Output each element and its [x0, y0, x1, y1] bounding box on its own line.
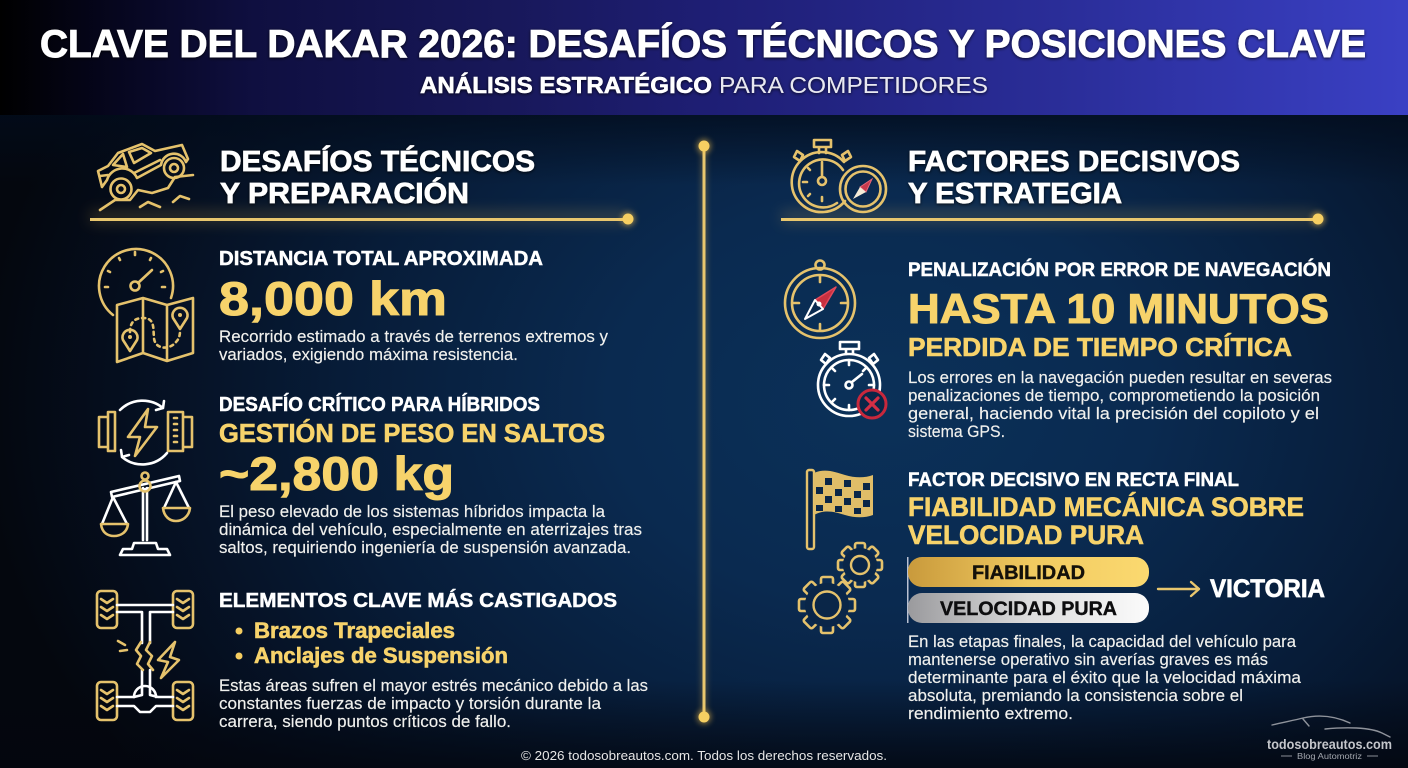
block: elementos clave: Estas áreas sufren el mayor estrés mecánico debido a las [219, 676, 648, 695]
block: distancia total: DISTANCIA TOTAL APROXIMADA [219, 248, 543, 270]
title: CLAVE DEL DAKAR 2026: DESAFÍOS TÉCNICOS Y POSICIONES CLAVE [40, 22, 1366, 66]
text block: etapas finales: mantenerse operativo sin averías graves es más [908, 650, 1268, 669]
block: factor decisivo: FIABILIDAD MECÁNICA SOBRE [908, 491, 1304, 522]
icon: gears [799, 543, 882, 633]
block: factor decisivo [908, 470, 1304, 550]
block: elementos clave: ELEMENTOS CLAVE MÁS CASTIGADOS [219, 589, 617, 612]
icon: navigation compass [785, 260, 855, 338]
block: elementos clave: carrera, siendo puntos críticos de fallo. [219, 712, 511, 731]
icon: speedometer and map [99, 249, 193, 362]
pill: fiabilidad: FIABILIDAD [972, 563, 1085, 584]
logo: todosobreautos: todosobreautos.com [1267, 737, 1392, 752]
header banner [0, 0, 1408, 115]
panel: right column [781, 140, 1332, 723]
heading: desafíos técnicos: DESAFÍOS TÉCNICOS [220, 144, 535, 178]
text block: etapas finales: absoluta, premiando la consistencia sobre el [908, 686, 1243, 705]
block: penalización: general, haciendo vital la precisión del copiloto y el [908, 404, 1319, 423]
block: penalización: penalizaciones de tiempo, comprometiendo la posición [908, 386, 1320, 405]
pill: velocidad pura [908, 593, 1149, 623]
icon: hybrid energy [99, 401, 192, 464]
icon: stopwatch and compass [792, 140, 886, 212]
block: híbridos: DESAFÍO CRÍTICO PARA HÍBRIDOS [219, 393, 540, 416]
block: distancia total: variados, exigiendo máxima resistencia. [219, 345, 518, 364]
block: factor decisivo: FACTOR DECISIVO EN RECTA FINAL [908, 470, 1239, 491]
block: penalización: Los errores en la navegación pueden resultar en severas [908, 368, 1332, 387]
text block: etapas finales [908, 632, 1302, 723]
icon: off-road jeep [98, 144, 193, 210]
block: penalización: PERDIDA DE TIEMPO CRÍTICA [908, 332, 1292, 362]
heading: desafíos técnicos [220, 144, 535, 210]
block: penalización: PENALIZACIÓN POR ERROR DE NAVEGACIÓN [908, 259, 1331, 281]
icon: suspension chassis [97, 591, 193, 720]
center divider [697, 139, 711, 724]
logo: todosobreautos [1267, 716, 1392, 761]
victoria label: VICTORIA [1210, 575, 1325, 603]
text block: etapas finales: rendimiento extremo. [908, 704, 1073, 723]
block: elementos clave: Anclajes de Suspensión [254, 643, 508, 668]
heading: factores decisivos: FACTORES DECISIVOS [908, 146, 1240, 178]
icon: balance scale [101, 472, 190, 555]
heading: factores decisivos [908, 146, 1240, 210]
block: híbridos: GESTIÓN DE PESO EN SALTOS [219, 418, 605, 448]
block: distancia total: Recorrido estimado a través de terrenos extremos y [219, 327, 608, 346]
pill: velocidad pura: VELOCIDAD PURA [940, 599, 1117, 620]
comparison pills [907, 557, 1149, 623]
block: híbridos: dinámica del vehículo, especialmente en aterrizajes tras [219, 520, 642, 539]
block: penalización [908, 259, 1332, 441]
block: híbridos [219, 393, 642, 557]
block: elementos clave: Brazos Trapeciales [254, 618, 455, 643]
block: híbridos: saltos, requiriendo ingeniería de suspensión avanzada. [219, 538, 631, 557]
block: penalización: HASTA 10 MINUTOS [908, 285, 1329, 332]
heading: factores decisivos: Y ESTRATEGIA [908, 178, 1122, 210]
subtitle: PARA COMPETIDORES [719, 72, 988, 98]
block: elementos clave [219, 589, 648, 731]
block: elementos clave: constantes fuerzas de impacto y torsión durante la [219, 694, 602, 713]
heading: desafíos técnicos: Y PREPARACIÓN [220, 176, 469, 210]
block: penalización: sistema GPS. [908, 422, 1005, 441]
block: distancia total [219, 248, 608, 364]
block: factor decisivo: VELOCIDAD PURA [908, 520, 1144, 550]
subtitle: ANÁLISIS ESTRATÉGICO [420, 71, 712, 98]
heading divider left [90, 211, 635, 226]
logo: todosobreautos: Blog Automotriz [1297, 751, 1362, 761]
block: distancia total: 8,000 km [219, 272, 447, 325]
pill: fiabilidad [908, 557, 1149, 587]
panel: left column [90, 144, 648, 731]
footer copyright: © 2026 todosobreautos.com. Todos los derechos reservados. [521, 748, 887, 763]
icon: checkered flag [807, 470, 873, 549]
heading divider right [781, 211, 1325, 226]
text block: etapas finales: determinante para el éxito que la velocidad máxima [908, 668, 1302, 687]
arrow to victoria [1158, 582, 1199, 596]
icon: stopwatch with error [818, 342, 886, 418]
text block: etapas finales: En las etapas finales, la capacidad del vehículo para [908, 632, 1297, 651]
block: híbridos: ~2,800 kg [219, 447, 454, 500]
block: híbridos: El peso elevado de los sistemas híbridos impacta la [219, 502, 606, 521]
